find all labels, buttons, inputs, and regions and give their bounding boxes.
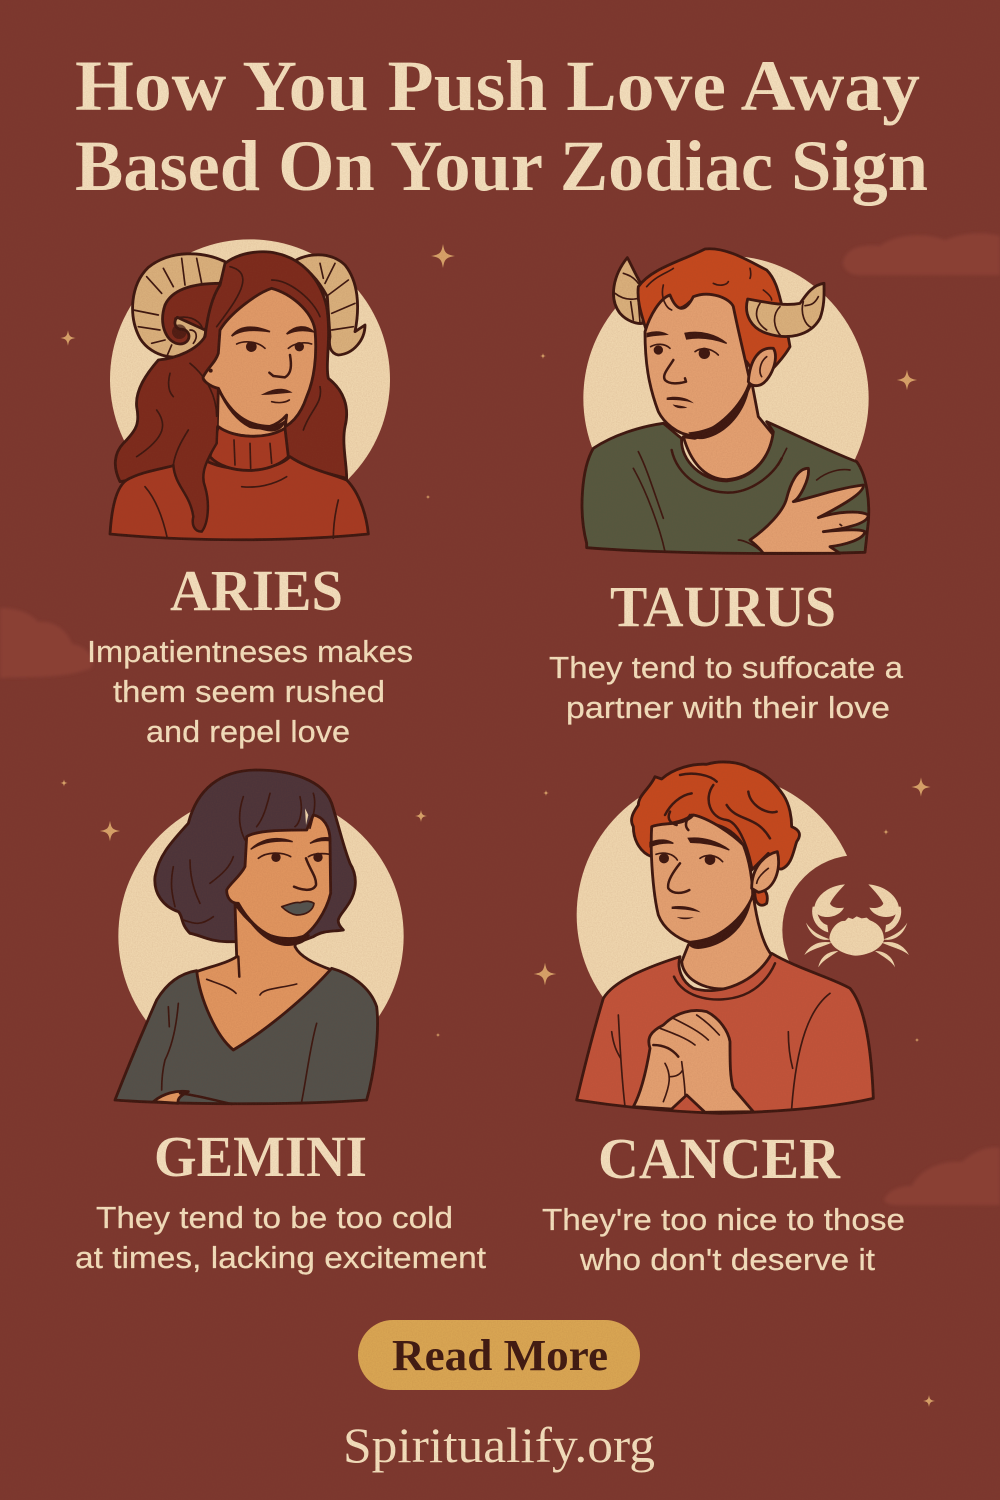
cloud: top right (843, 233, 1000, 275)
taurus description (549, 650, 904, 725)
cancer portrait (577, 762, 932, 1113)
cancer description: They're too nice to those (542, 1202, 905, 1237)
decorative stars (60, 244, 935, 1407)
button: read more: Read More (392, 1331, 608, 1380)
gemini description: They tend to be too cold (96, 1200, 453, 1235)
crab icon (804, 884, 909, 967)
gemini heading: GEMINI (154, 1124, 367, 1189)
long hair strand (173, 417, 217, 532)
taurus portrait (582, 249, 869, 553)
cloud: lower right (884, 1148, 1000, 1205)
cancer heading: CANCER (598, 1126, 841, 1191)
cancer description: who don't deserve it (579, 1242, 875, 1277)
aries portrait (110, 239, 390, 540)
button: read more (358, 1320, 640, 1390)
taurus description: partner with their love (566, 690, 890, 725)
taurus heading: TAURUS (610, 574, 836, 639)
swirl of hair in horn (163, 283, 221, 344)
gemini description: at times, lacking excitement (75, 1240, 486, 1275)
gemini portrait (115, 770, 404, 1104)
aries description: Impatientneses makes (87, 634, 413, 669)
aries description: and repel love (146, 714, 350, 749)
panel: taurus (549, 249, 904, 725)
panel: gemini (75, 770, 486, 1275)
title: Based On Your Zodiac Sign (75, 126, 928, 206)
title: How You Push Love Away (75, 46, 920, 126)
title (75, 46, 928, 206)
aries description (87, 634, 413, 749)
gemini description (75, 1200, 486, 1275)
panel: aries (87, 239, 413, 749)
cloud: left (0, 608, 93, 678)
cancer description (542, 1202, 905, 1277)
panel: cancer (542, 762, 932, 1277)
taurus description: They tend to suffocate a (549, 650, 904, 685)
footer website: Spiritualify.org (343, 1417, 655, 1473)
aries description: them seem rushed (113, 674, 385, 709)
aries heading: ARIES (170, 558, 343, 623)
